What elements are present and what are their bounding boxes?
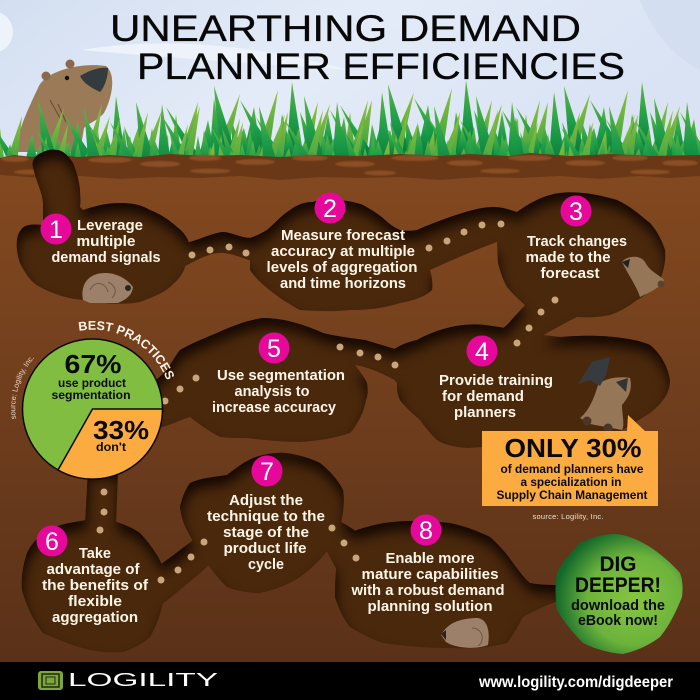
logility logo <box>38 670 218 690</box>
pie chart: best practices: 33% <box>93 415 149 445</box>
step 4: planners <box>454 404 516 421</box>
step 8: Enable more <box>386 550 474 567</box>
chamber 1 <box>17 150 189 304</box>
step 2: Measure forecast <box>281 227 405 244</box>
step 7: 7 <box>260 458 274 486</box>
soil surface strip <box>0 153 700 180</box>
dig deeper button <box>556 534 683 654</box>
step 8: 8 <box>419 517 433 545</box>
capybara with graduation cap in chamber 4 <box>578 357 631 432</box>
website url: www.logility.com/digdeeper <box>478 674 673 691</box>
step 1: 1 <box>49 216 63 244</box>
step 4: for demand <box>442 388 524 405</box>
step 3: Track changes <box>527 233 627 250</box>
pie chart: best practices: segmentation <box>52 390 130 402</box>
tunnel 7 to 8 <box>325 520 368 585</box>
pie chart: best practices: use product <box>58 378 126 390</box>
step 1 <box>40 214 160 266</box>
chamber 7 <box>180 453 344 593</box>
step 6: aggregation <box>52 609 138 626</box>
step 4: Provide training <box>439 372 553 389</box>
burrow network <box>17 150 670 652</box>
dig deeper button: DIG <box>600 553 636 576</box>
curved label: best practices: BEST PRACTICES <box>78 321 174 380</box>
tunnel dots <box>96 220 558 584</box>
step 5: Use segmentation <box>217 367 345 384</box>
pie chart: best practices <box>22 339 163 479</box>
tunnel 6 to 7 <box>158 528 215 606</box>
callout: only 30%: a specialization in <box>520 475 622 489</box>
step 1: Leverage <box>77 217 143 234</box>
chamber 2 and tunnel to 3 <box>250 199 517 311</box>
step 6 <box>36 526 149 626</box>
step 4 <box>439 336 553 421</box>
title: UNEARTHING DEMAND <box>110 8 581 49</box>
capybara in chamber 3 <box>622 257 664 297</box>
step 6: the benefits of <box>42 577 149 594</box>
chamber 5 and tunnels <box>150 318 395 442</box>
logility logo: LOGILITY <box>68 670 218 690</box>
footer bar <box>0 662 700 700</box>
callout: only 30%: Supply Chain Management <box>496 488 648 502</box>
step 6: Take <box>79 545 111 562</box>
badges and step texts <box>36 192 627 626</box>
tunnel to chamber 6 <box>85 470 118 525</box>
pie chart: best practices: don't <box>96 442 126 454</box>
dig deeper button: download the <box>571 598 665 614</box>
step 7: stage of the <box>223 524 309 541</box>
step 6: flexible <box>68 593 122 610</box>
step 7: cycle <box>248 556 284 573</box>
step 8: with a robust demand <box>351 582 504 599</box>
chamber 4 <box>393 324 670 448</box>
step 4: 4 <box>475 338 489 366</box>
step 8 <box>351 514 504 615</box>
source note for callout: source: Logility, Inc. <box>532 512 604 521</box>
dig deeper button: eBook now! <box>578 613 658 629</box>
title: PLANNER EFFICIENCIES <box>137 46 625 87</box>
step 2: and time horizons <box>280 275 406 292</box>
step 3: forecast <box>540 265 600 282</box>
capybara sleeping in chamber 1 <box>82 273 133 303</box>
dig deeper button: DEEPER! <box>575 574 661 597</box>
curved label: pie source: source: Logility, Inc. <box>11 358 34 419</box>
capybara on the surface <box>14 60 112 152</box>
capybara sleeping in chamber 8 <box>441 618 489 648</box>
step 5: 5 <box>267 335 281 363</box>
step 7 <box>207 456 325 573</box>
step 5: increase accuracy <box>212 399 337 416</box>
step 1: multiple <box>76 233 136 250</box>
callout: only 30%: of demand planners have <box>500 462 644 476</box>
step 3 <box>526 196 627 282</box>
chamber 3 and tunnel to 4 <box>490 192 665 345</box>
tunnel 1 to 2 <box>180 232 255 268</box>
step 1: demand signals <box>52 249 160 266</box>
step 6: advantage of <box>46 561 140 578</box>
step 5 <box>212 332 345 416</box>
step 7: Adjust the <box>229 492 303 509</box>
step 5: analysis to <box>234 383 310 400</box>
sky background <box>0 0 700 170</box>
step 7: product life <box>224 540 306 557</box>
pie chart: best practices: 67% <box>64 349 122 379</box>
underground soil <box>0 172 700 664</box>
callout: only 30%: ONLY 30% <box>504 433 642 463</box>
step 2: 2 <box>323 195 337 223</box>
callout: only 30% <box>482 415 658 506</box>
grass <box>0 80 700 182</box>
step 7: technique to the <box>207 508 325 525</box>
step 3: 3 <box>569 198 583 226</box>
chamber 6 <box>22 519 165 652</box>
step 6: 6 <box>45 528 59 556</box>
step 2: accuracy at multiple <box>271 243 415 260</box>
step 3: made to the <box>526 249 610 266</box>
step 8: mature capabilities <box>362 566 498 583</box>
step 2: levels of aggregation <box>266 259 418 276</box>
step 8: planning solution <box>368 598 492 615</box>
step 2 <box>266 192 418 292</box>
title <box>110 8 625 87</box>
chamber 8 and tunnel to blob <box>335 521 560 648</box>
